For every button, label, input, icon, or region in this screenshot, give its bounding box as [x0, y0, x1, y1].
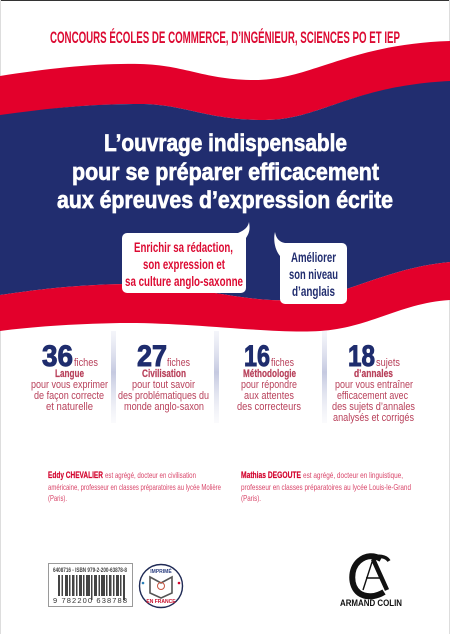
stat: 16 fiches méthodologie: fiches	[271, 357, 294, 369]
author: Mathias Degoute: est agrégé, docteur en linguistique,	[303, 470, 403, 480]
speech bubble: améliorer: d’anglais	[292, 283, 335, 299]
stat: 36 fiches langue: pour vous exprimer	[31, 379, 108, 391]
author: Eddy Chevalier: (Paris).	[48, 493, 67, 503]
stat: 18 sujets d'annales: d’annales	[354, 368, 393, 380]
stat: 16 fiches méthodologie: aux attentes	[244, 390, 294, 402]
logo: Armand Colin: ARMAND COLIN	[340, 598, 402, 609]
speech bubble: améliorer: Améliorer	[291, 249, 336, 265]
stamp: imprimé en France: IMPRIMÉ	[150, 567, 172, 575]
author: Eddy Chevalier: américaine, professeur en classes préparatoires au lycée Molière	[48, 482, 221, 492]
stat: 16 fiches méthodologie: 16	[244, 340, 270, 373]
main heading: aux épreuves d’expression écrite	[57, 187, 393, 214]
speech bubble: enrichir: son expression et	[143, 256, 225, 272]
stat: 27 fiches civilisation: 27	[137, 340, 167, 373]
column separators	[111, 331, 327, 423]
stat: 27 fiches civilisation	[118, 340, 209, 413]
stat: 36 fiches langue	[31, 340, 108, 413]
speech bubble: améliorer	[274, 232, 347, 304]
author: Mathias Degoute: (Paris).	[241, 493, 261, 503]
speech bubble: enrichir: sa culture anglo-saxonne	[125, 273, 243, 289]
logo: Armand Colin	[340, 556, 402, 609]
stat: 36 fiches langue: de façon correcte	[34, 390, 104, 402]
main heading: L’ouvrage indispensable	[104, 130, 347, 157]
navy band	[0, 81, 450, 300]
stat: 18 sujets d'annales: 18	[348, 340, 375, 373]
speech bubble: améliorer: son niveau	[289, 266, 338, 282]
stat: 16 fiches méthodologie: Méthodologie	[243, 368, 296, 380]
stat: 18 sujets d'annales: pour vous entraîner	[335, 379, 413, 391]
stat: 27 fiches civilisation: Civilisation	[142, 368, 186, 380]
stat: 36 fiches langue: Langue	[55, 368, 84, 380]
author: Eddy Chevalier: Eddy CHEVALIER	[48, 470, 103, 481]
speech bubble: enrichir: Enrichir sa rédaction,	[134, 239, 233, 255]
top red wave	[0, 41, 450, 120]
stamp: imprimé en France: EN FRANCE	[146, 599, 176, 605]
stat: 16 fiches méthodologie	[237, 340, 301, 413]
author: Mathias Degoute	[241, 470, 411, 503]
stamp: imprimé en France	[140, 564, 182, 608]
stat: 18 sujets d'annales: analysés et corrigés	[333, 412, 414, 424]
stat: 16 fiches méthodologie: pour répondre	[241, 379, 297, 391]
stat: 36 fiches langue: fiches	[74, 357, 98, 369]
barcode: 9 782200 638788	[53, 596, 127, 605]
stat: 36 fiches langue: 36	[42, 340, 73, 373]
barcode: 6408716 - ISBN 979-2-200-63878-8	[53, 568, 128, 574]
author: Eddy Chevalier: est agrégé, docteur en civilisation	[105, 470, 196, 480]
stat: 18 sujets d'annales	[332, 340, 415, 424]
stat: 27 fiches civilisation: monde anglo-saxon	[124, 401, 204, 413]
author: Eddy Chevalier	[48, 470, 221, 503]
stat: 36 fiches langue: et naturelle	[46, 401, 93, 413]
main heading	[57, 130, 393, 214]
barcode	[48, 564, 132, 606]
stat: 27 fiches civilisation: fiches	[167, 357, 190, 369]
stat: 18 sujets d'annales: sujets	[376, 357, 400, 369]
author: Mathias Degoute: Mathias DEGOUTE	[241, 470, 301, 481]
stat: 18 sujets d'annales: efficacement avec	[337, 390, 408, 402]
stat: 27 fiches civilisation: des problématiques du	[118, 390, 209, 402]
stat: 27 fiches civilisation: pour tout savoir	[132, 379, 195, 391]
stat: 16 fiches méthodologie: des correcteurs	[237, 401, 301, 413]
bottom red wave	[0, 262, 450, 331]
stat: 18 sujets d'annales: des sujets d’annales	[332, 401, 415, 413]
main heading: pour se préparer efficacement	[72, 159, 379, 186]
speech bubble: enrichir	[122, 222, 250, 293]
